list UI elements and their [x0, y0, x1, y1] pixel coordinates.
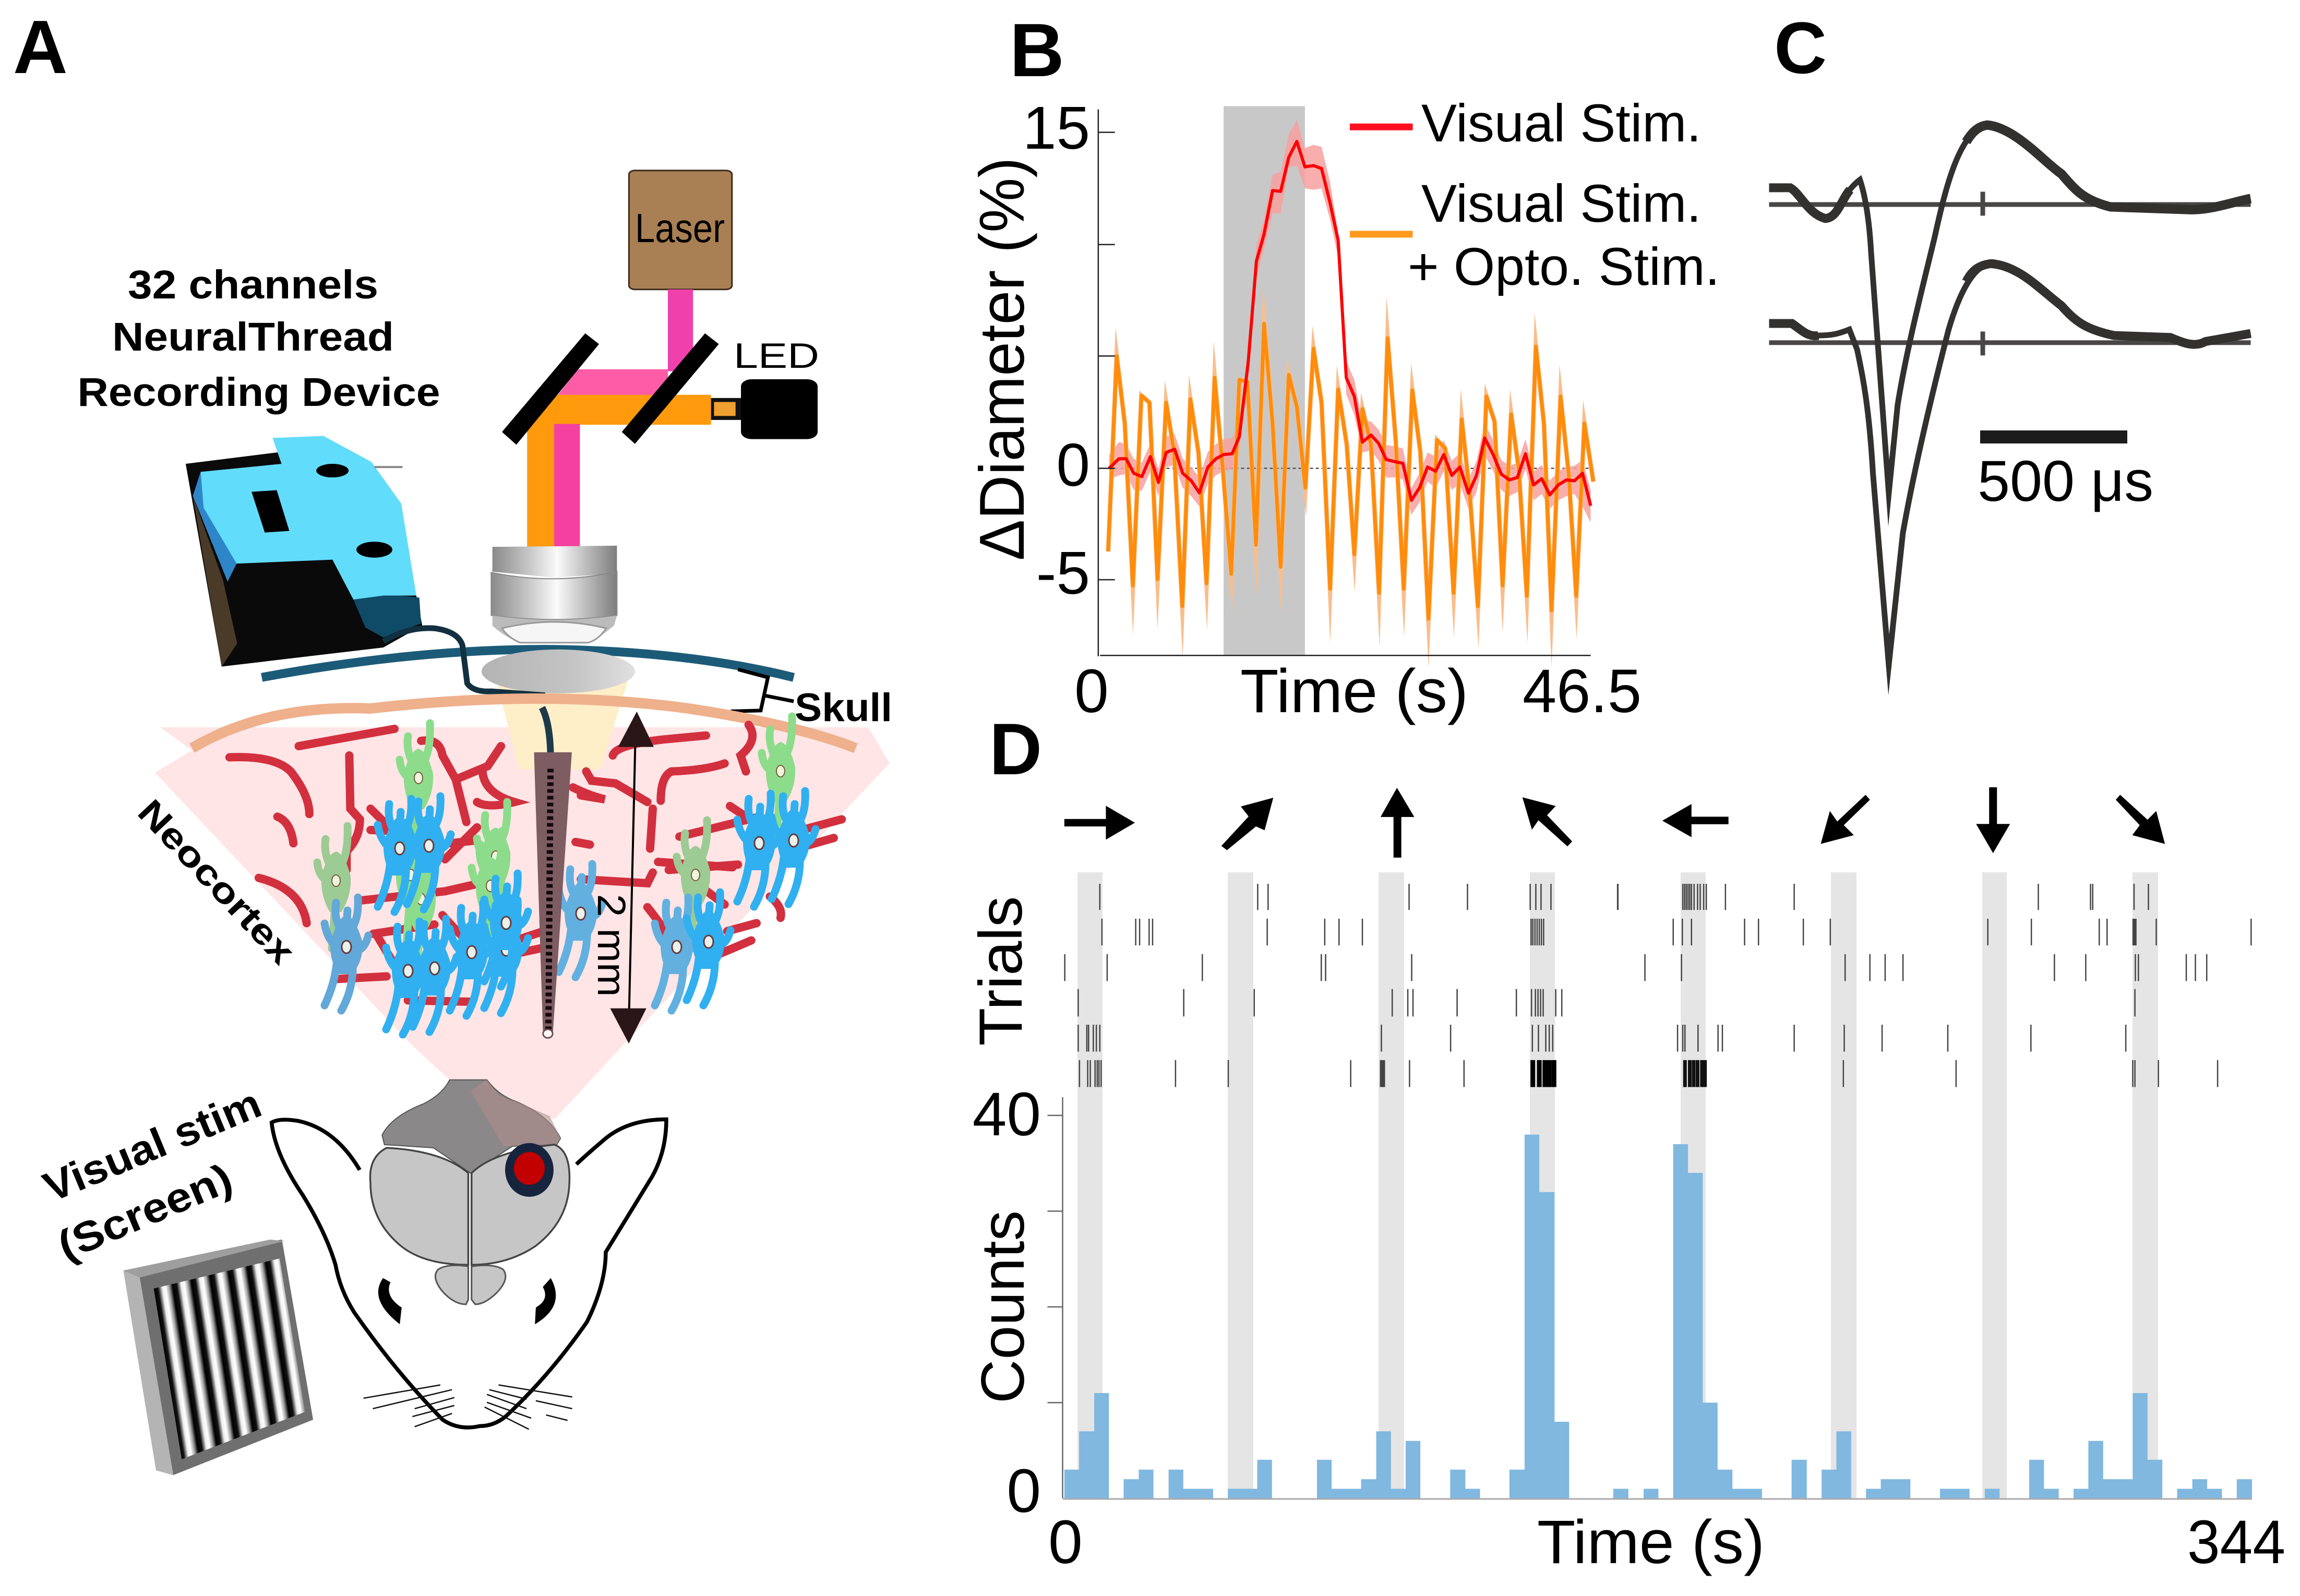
left hemisphere — [370, 1148, 468, 1265]
y tick labels: -5 — [1036, 539, 1090, 607]
visual stim label: (Screen) — [51, 1155, 239, 1269]
scale bar — [1980, 430, 2127, 443]
scale label: 500 μs — [1978, 449, 2153, 513]
panel D: direction tuning raster and histogram — [966, 787, 2285, 1577]
mirrors — [502, 333, 719, 445]
histogram bars right — [1644, 1144, 2252, 1498]
histogram right half — [1644, 1144, 2252, 1498]
y tick labels: 15 — [1023, 94, 1090, 162]
y tick labels: 0 — [1056, 431, 1090, 499]
y axis title: ΔDiameter (%) — [966, 158, 1037, 560]
x axis labels — [1074, 657, 1642, 726]
red line — [1109, 141, 1591, 506]
orange error spikes — [1108, 323, 1594, 619]
green neurons — [317, 716, 795, 967]
direction arrows right — [1662, 787, 2165, 853]
panel label C: C — [1774, 7, 1827, 89]
cranial window glass — [262, 650, 794, 677]
face outline — [272, 1119, 666, 1427]
orange line — [1108, 323, 1594, 619]
beams — [527, 290, 711, 548]
baselines — [1769, 191, 2250, 355]
device heading: NeuralThread — [112, 315, 394, 359]
visual stim label: Visual stim — [37, 1079, 268, 1211]
x axis labels: Time (s) — [1240, 657, 1468, 726]
panel B: diameter chart — [966, 93, 1720, 726]
right hemisphere — [472, 1145, 569, 1265]
2 mm depth arrow — [610, 712, 654, 1043]
skull arc — [192, 699, 856, 748]
panel A: experimental setup — [37, 171, 892, 1475]
stimulus shading — [1224, 106, 1305, 655]
cable — [384, 628, 545, 695]
waveform top — [1769, 125, 2250, 493]
whiskers — [364, 1385, 572, 1429]
device heading: 32 channels — [128, 262, 378, 307]
x axis labels — [1048, 1508, 2285, 1577]
optical path — [186, 171, 818, 711]
mouse head — [272, 1080, 666, 1429]
objective lens — [491, 546, 617, 643]
panel label D: D — [989, 708, 1042, 790]
zero line — [1109, 467, 1591, 469]
histogram left half — [1048, 1097, 1628, 1498]
histogram y labels: 40 — [973, 1080, 1041, 1149]
skull label: Skull — [795, 686, 892, 730]
panel label B: B — [1010, 8, 1064, 92]
olfactory bulbs — [435, 1265, 506, 1304]
raster ticks right half — [1618, 884, 2251, 1087]
light cone under window — [496, 678, 629, 770]
2 mm label: 2 mm — [589, 894, 633, 997]
LED label: LED — [734, 336, 819, 376]
legend swatches — [1350, 124, 1413, 130]
recording device body — [186, 436, 422, 667]
cerebellum — [382, 1080, 560, 1173]
y tick labels — [1023, 94, 1090, 607]
direction arrows left — [1064, 788, 1572, 858]
device heading — [77, 262, 440, 415]
blue neurons — [325, 791, 816, 1035]
legend text: + Opto. Stim. — [1408, 237, 1720, 296]
laser box — [629, 171, 732, 290]
pink imaging wedge — [155, 727, 890, 1119]
legend text: Visual Stim. — [1421, 93, 1702, 153]
x axis labels: 0 — [1074, 657, 1109, 726]
panel label A: A — [13, 5, 68, 89]
histogram bars left — [1064, 1135, 1628, 1498]
red error band — [1109, 120, 1591, 522]
axes and ticks — [1098, 110, 1591, 656]
cranial window ellipse — [482, 650, 635, 693]
trials label: Trials — [966, 896, 1035, 1046]
x axis labels: 0 — [1048, 1508, 1083, 1577]
stimulus shading — [1077, 872, 2158, 1498]
histogram axis — [1048, 1097, 1063, 1498]
x axis labels: 46.5 — [1523, 657, 1642, 726]
neocortex label: Neocortex — [130, 792, 303, 972]
cranial window marker — [505, 1143, 554, 1197]
waveform bottom — [1769, 263, 2250, 665]
legend text: Visual Stim. — [1421, 174, 1702, 233]
LED source — [711, 379, 818, 439]
eyes — [378, 1278, 556, 1324]
wedge tint on brain — [471, 1080, 560, 1146]
legend swatch orange — [1350, 231, 1413, 237]
histogram y labels — [973, 1080, 1041, 1526]
legend text — [1408, 93, 1720, 296]
panel C: spike waveforms — [1769, 125, 2250, 665]
counts label: Counts — [968, 1210, 1037, 1403]
blood vessels — [230, 725, 842, 1002]
histogram baseline — [1063, 1498, 2252, 1499]
visual stim label — [37, 1079, 268, 1269]
neural probe — [534, 707, 572, 1038]
x axis labels: 344 — [2187, 1508, 2285, 1577]
laser label: Laser — [635, 205, 725, 251]
device heading: Recording Device — [77, 370, 440, 415]
raster ticks left half — [1065, 884, 1618, 1087]
skull bracket — [731, 669, 794, 711]
grating screen — [124, 1240, 313, 1475]
histogram y labels: 0 — [1007, 1457, 1041, 1526]
x axis labels: Time (s) — [1537, 1508, 1765, 1577]
